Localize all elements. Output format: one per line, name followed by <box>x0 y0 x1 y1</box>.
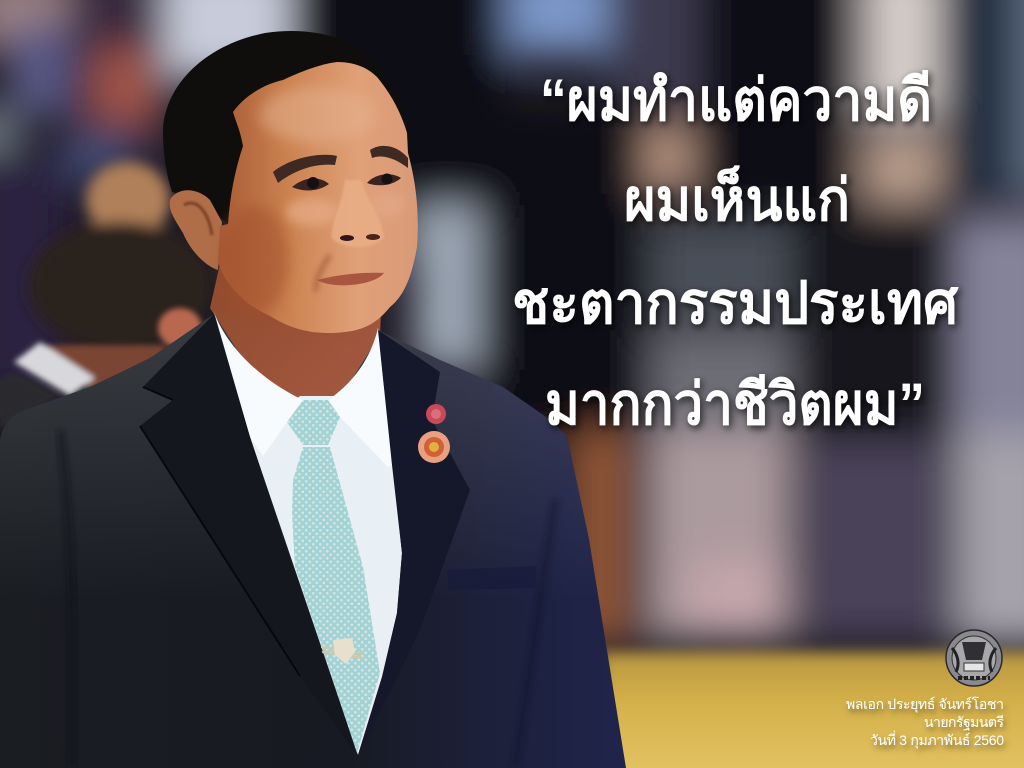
eyes <box>292 174 401 190</box>
mouth <box>317 273 384 285</box>
necktie <box>287 400 380 753</box>
neck <box>210 255 382 406</box>
quote line 1: “ผมทำแต่ความดี <box>540 68 932 133</box>
jacket pocket <box>447 566 537 590</box>
attribution text <box>846 696 1004 749</box>
quote text <box>512 68 959 437</box>
main figure <box>0 31 626 768</box>
name: พลเอก ประยุทธ์ จันทร์โอชา <box>846 696 1004 713</box>
date: วันที่ 3 กุมภาพันธ์ 2560 <box>870 731 1004 749</box>
left lapel <box>140 314 357 755</box>
eyebrows <box>273 155 337 183</box>
background person at left <box>0 162 212 430</box>
lapel pin small <box>426 404 446 424</box>
nose <box>332 180 384 247</box>
lapel pin large <box>418 431 450 463</box>
tie clip <box>321 638 364 664</box>
right lapel <box>358 330 470 755</box>
quote line 3: ชะตากรรมประเทศ <box>512 271 959 336</box>
hair <box>163 31 412 224</box>
suit jacket <box>0 314 626 768</box>
government seal icon <box>946 630 1002 686</box>
shirt and collar <box>214 312 402 755</box>
quote line 2: ผมเห็นแก่ <box>624 165 850 233</box>
position: นายกรัฐมนตรี <box>924 714 1004 731</box>
quote line 4: มากกว่าชีวิตผม” <box>545 372 925 437</box>
ear <box>170 190 222 270</box>
face <box>218 62 418 333</box>
